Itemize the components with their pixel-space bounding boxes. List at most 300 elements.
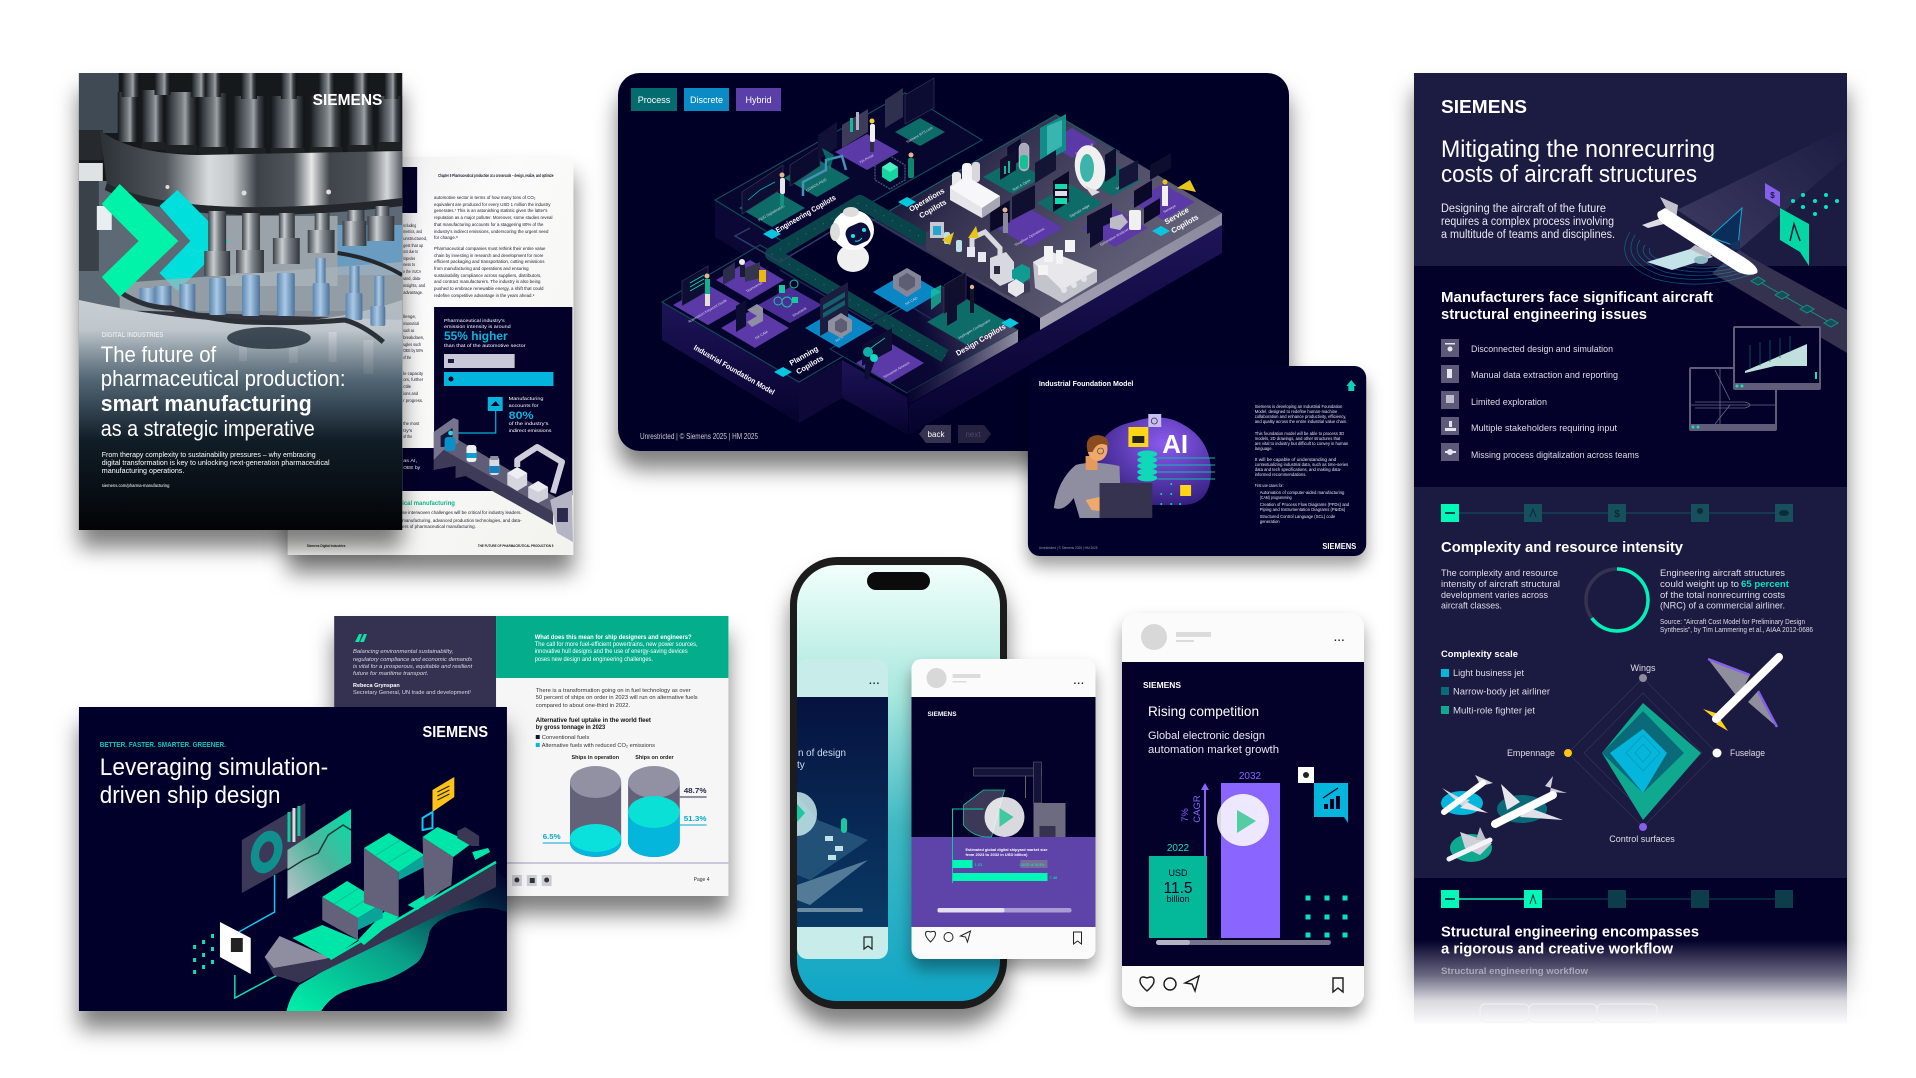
subtitle: digital transformation is key to unlocking next-generation pharmaceutical	[102, 458, 330, 467]
panel: pharma whitepaper cover	[79, 73, 402, 530]
legend: complexity scale: Light business jet	[1453, 668, 1525, 678]
play button	[1217, 794, 1269, 846]
body text: 50 percent of ships on order in 2023 will run on alternative fuels	[536, 695, 698, 701]
heading: workflow: Structural engineering encompasses	[1441, 924, 1699, 940]
icon: cyan chevron	[159, 190, 228, 291]
navy emissions callout: accounts for	[509, 403, 539, 409]
process chain	[1751, 277, 1838, 327]
card text: n of design	[798, 748, 846, 759]
title	[100, 754, 328, 809]
photo: pistons and vials	[79, 206, 402, 530]
quote panel	[334, 616, 496, 707]
url: siemens.com/pharma-manufacturing	[102, 483, 170, 489]
card body: dark: 7.46	[1050, 875, 1058, 880]
slide body text: contextualizing industrial data, such as time-series	[1255, 462, 1349, 467]
illustration: donut panel	[242, 803, 305, 893]
body text: redefine competitive advantage in the years ahead.⁹	[434, 293, 535, 299]
quote panel: Balancing environmental sustainability,	[353, 649, 453, 655]
cylinder chart: 51.3%	[684, 814, 707, 823]
dot matrix	[1791, 193, 1839, 216]
intro text: Designing the aircraft of the future	[1441, 203, 1606, 215]
left column partial text: ugles such	[403, 342, 421, 348]
dot matrix	[1306, 896, 1348, 938]
slide body text: generation	[1260, 519, 1280, 524]
left column partial text: gest that up	[403, 243, 423, 249]
icon: home	[1346, 380, 1356, 391]
panel: ship design cover	[79, 707, 507, 1011]
intro text	[1441, 203, 1615, 241]
tile labels: Senseye	[1162, 204, 1177, 214]
body text: and contract manufacturers. The industry is also being	[434, 279, 541, 285]
navy emissions callout: as AI,	[403, 458, 417, 464]
legend: complexity scale: Narrow-body jet airliner	[1453, 686, 1550, 696]
tile labels: Simcenter Amesim	[883, 361, 910, 379]
navy emissions callout: 55% higher	[444, 329, 508, 343]
copilot labels: Planning	[788, 344, 820, 368]
slide footer: Unrestricted | © Siemens 2025 | HM 2025	[1039, 545, 1098, 550]
title	[101, 342, 346, 441]
copilot labels: Service	[1163, 205, 1191, 226]
body text: sustainability compliance across suppliers, distributors,	[434, 273, 541, 279]
cylinder chart: Ships in operation	[572, 755, 619, 761]
chart legend: Alternative fuels with reduced CO₂ emissions	[542, 743, 655, 749]
complexity text: development varies across	[1441, 590, 1548, 601]
subheading: workflow: Structural engineering workflow	[1441, 966, 1589, 976]
legend: complexity scale: Multi-role fighter jet	[1453, 706, 1536, 716]
back button: back	[928, 430, 945, 439]
slide body text: collaboration and enhance productivity, efficiency,	[1255, 414, 1346, 419]
tile labels: Siemens RTS.com	[906, 126, 933, 144]
heading: issues: structural engineering issues	[1441, 306, 1647, 323]
title: costs of aircraft structures	[1441, 161, 1697, 188]
tile labels: Senti	[1115, 183, 1124, 191]
radar chart	[1507, 663, 1765, 844]
slide body text: language.	[1255, 446, 1273, 451]
logo: SIEMENS	[1143, 681, 1182, 690]
issue list	[1441, 339, 1639, 461]
navy emissions callout: Pharmaceutical industry's	[444, 318, 505, 324]
software tiles	[673, 118, 1195, 383]
next button	[958, 425, 991, 443]
navy emissions callout: Manufacturing	[509, 396, 544, 402]
back button	[919, 425, 951, 443]
subtitle: manufacturing operations.	[102, 466, 184, 475]
body text: from manufacturing and operations and ensuring	[434, 266, 529, 272]
page footer: Page 4	[694, 877, 710, 883]
body text	[434, 195, 552, 299]
bar chart: USD	[1168, 868, 1188, 878]
cylinder chart: 6.5%	[543, 832, 561, 841]
card text	[797, 748, 846, 771]
icon: green chevron	[102, 184, 178, 297]
logo: SIEMENS	[423, 724, 488, 741]
copilot labels: Engineering Copilots	[774, 193, 837, 235]
tile labels: Sigmatic edge	[1069, 204, 1090, 219]
tile labels: NX X	[835, 335, 845, 343]
body text: efficient packaging and transportation, cutting emissions	[434, 259, 545, 265]
icon: dollar tag	[1765, 183, 1780, 207]
tile labels: P&ID Digitalization	[758, 204, 785, 222]
body text: automotive sector in terms of how many tons of CO₂	[434, 195, 536, 201]
heading: issues	[1441, 289, 1713, 323]
card title: Rising competition	[1148, 703, 1259, 719]
nrc text: (NRC) of a commercial airliner.	[1660, 600, 1785, 612]
copilot labels: Copilots	[918, 197, 948, 220]
left column partial text: ors, further	[403, 377, 423, 383]
icon: machining centre	[1033, 240, 1097, 303]
copilot labels: Operations	[907, 186, 946, 214]
bar chart: CAGR	[1192, 795, 1203, 823]
cylinder chart	[543, 755, 707, 857]
bar chart: 7%	[1180, 808, 1191, 822]
complexity text: The complexity and resource	[1441, 568, 1558, 579]
illustration: container ship	[265, 827, 496, 983]
title: pharmaceutical production:	[101, 366, 346, 391]
slide body text: Creation of Process Flow Diagrams (PFDs) and	[1260, 502, 1350, 507]
card body: dark: 1.03	[974, 862, 983, 867]
chart heading: by gross tonnage in 2023	[536, 725, 606, 731]
tile labels: Automation Keyword Guide	[688, 298, 727, 324]
icon: factory	[950, 162, 1000, 218]
play button	[984, 797, 1024, 837]
planning figures	[682, 259, 941, 380]
panel: smartphone	[790, 557, 1007, 1009]
right operations slab	[872, 115, 1222, 330]
next button: next	[965, 430, 981, 439]
card text: ty	[797, 760, 805, 771]
connector lines	[235, 875, 278, 998]
body text: generates.⁷ This is an astonishing statistic given the latter's	[434, 208, 548, 214]
bar chart	[1149, 771, 1280, 938]
step tracker 1	[1441, 504, 1793, 522]
left column partial text: metrics, and	[403, 229, 422, 235]
slide body text: Piping and Instrumentation Diagrams (P&IDs)	[1260, 507, 1346, 512]
logo: SIEMENS	[1441, 97, 1527, 117]
illustration: airliner with wireframe wing	[1625, 197, 1758, 284]
tabs: Process	[638, 95, 671, 105]
page footer	[307, 543, 554, 548]
illustration: person with AI	[1054, 414, 1215, 518]
icon: white head	[1074, 145, 1106, 196]
icons: three aircraft classes	[1441, 775, 1567, 862]
left column partial text: unstructured,	[403, 236, 427, 242]
navy emissions callout: indirect emissions	[509, 428, 552, 434]
heading: workflow	[1441, 924, 1699, 958]
body text: for change.⁸	[434, 235, 458, 241]
wave	[286, 870, 507, 1011]
left column partial text: maceutical	[403, 321, 419, 327]
heading: workflow: a rigorous and creative workflow	[1441, 940, 1673, 958]
slide body text: are vital to industry but difficult to convey in human	[1255, 441, 1349, 446]
step tracker 1: $	[1614, 509, 1620, 520]
left column partial text: breakdown,	[403, 335, 424, 341]
copilot diamond icons	[763, 197, 1170, 377]
eyebrow: BETTER. FASTER. SMARTER. GREENER.	[100, 742, 226, 749]
cylinder chart: Ships on order	[635, 755, 675, 761]
tile labels: NX CAD	[905, 296, 919, 306]
illustration: white card	[220, 922, 251, 974]
slide body text	[1255, 404, 1350, 524]
tile labels: TIA Portal	[859, 153, 875, 165]
left column partial text: insights, and	[403, 283, 425, 289]
nrc text: Engineering aircraft structures	[1660, 568, 1785, 579]
card body: dark: from 2023 to 2032 in USD billion)	[966, 852, 1028, 857]
illustration: person with AI: AI	[1162, 431, 1188, 459]
card footer icons	[1140, 976, 1343, 992]
title: Leveraging simulation-	[100, 754, 328, 781]
tile labels: Generation Analyzer	[1099, 227, 1130, 247]
body text: pushed to embrace renewable energy, a shift that could	[434, 286, 544, 292]
tile labels: Sinumerik	[792, 306, 808, 318]
body text: equivalent are produced for every USD 1 million the industry	[434, 202, 551, 208]
intro text: requires a complex process involving	[1441, 216, 1614, 228]
left column partial text: le capacity	[403, 371, 424, 377]
left column partial text: e the VUCA	[403, 269, 422, 275]
left column partial text: ions and	[403, 391, 418, 397]
progress bar	[938, 908, 1072, 912]
complexity text: intensity of aircraft structural	[1441, 579, 1560, 590]
green question header: innovative hull designs and the use of energy-saving devices	[535, 649, 688, 655]
copilot labels	[692, 186, 1200, 397]
body text: reputation as a major polluter. Moreover, some studies reveal	[434, 215, 552, 221]
heading: issues: Manufacturers face significant aircraft	[1441, 289, 1713, 306]
footer note: Unrestricted | © Siemens 2025 | HM 2025	[640, 432, 758, 441]
issue list: Manual data extraction and reporting	[1471, 370, 1618, 381]
panel: isometric copilots slide	[618, 73, 1289, 451]
panel: pharma whitepaper inner page	[288, 157, 573, 555]
icon: service machine	[1110, 210, 1141, 230]
tabs: Hybrid	[745, 95, 772, 105]
panel: post card inside phone	[777, 659, 888, 959]
page footer	[507, 863, 728, 886]
operations objects: screens	[990, 114, 1196, 248]
copilot labels: Copilots	[1170, 212, 1200, 235]
card subtitle	[1148, 730, 1279, 756]
left column partial text: ost due to	[403, 249, 418, 255]
illustration: line chart panel	[287, 809, 351, 899]
chart heading	[536, 718, 651, 731]
navy emissions callout: of the industry's	[509, 421, 549, 427]
donut chart 65 percent	[1586, 569, 1648, 631]
body text: chain by investing in research and development for more	[434, 253, 544, 259]
complexity text: aircraft classes.	[1441, 600, 1502, 612]
card header	[926, 668, 1085, 688]
menu dots: ...	[869, 676, 880, 687]
card body: dark: CAGR of 16.8%	[1020, 863, 1044, 867]
quote panel: Rebeca Grynspan	[353, 683, 400, 689]
left column partial text: the most	[403, 421, 420, 427]
bar chart: billion	[1166, 894, 1190, 904]
tile labels	[688, 126, 1177, 379]
left column partial text: r progress.	[403, 398, 423, 404]
copilot band path	[735, 202, 960, 356]
nrc text: of the total nonrecurring costs	[1660, 590, 1785, 601]
dot field	[193, 934, 214, 974]
radar chart: Control surfaces	[1609, 834, 1675, 844]
navy emissions callout: OEE by	[403, 465, 421, 471]
slide body text: Model, designed to redefine human-machine	[1255, 409, 1338, 414]
panel: ship whitepaper inner page	[334, 616, 728, 896]
copilot labels: Copilots	[795, 353, 825, 376]
engineering platform	[715, 93, 982, 247]
green question header	[496, 616, 728, 678]
issue list: Disconnected design and simulation	[1471, 344, 1613, 355]
slide body text: (CAM) programming	[1260, 495, 1292, 500]
icon: chart tag	[1298, 767, 1348, 823]
panel: market growth post card	[1122, 613, 1364, 1007]
title	[1441, 136, 1715, 188]
conveyor illustration	[434, 418, 573, 542]
isometric base blocks	[662, 200, 1222, 435]
tile labels: NX CAM	[754, 330, 769, 340]
slide title: Industrial Foundation Model	[1039, 379, 1133, 388]
body text	[536, 688, 698, 709]
icon: dollar tag: $	[1770, 191, 1775, 200]
radar chart: Empennage	[1507, 748, 1555, 758]
nrc text: could weight up to	[1660, 579, 1739, 590]
phone notch	[867, 572, 930, 590]
title: smart manufacturing	[101, 391, 312, 416]
closing text: ers of pharmaceutical manufacturing.	[402, 524, 476, 530]
step tracker 2	[1441, 890, 1793, 908]
logo: SIEMENS	[313, 92, 382, 109]
slide body text: Siemens is developing an Industrial Foundation	[1255, 404, 1343, 409]
issue list: Missing process digitalization across teams	[1471, 450, 1639, 461]
card footer icons	[926, 931, 1082, 944]
section heading: clinical manufacturing: ical manufacturing	[402, 501, 455, 507]
navy emissions callout: emission intensity is around	[444, 324, 511, 330]
tile labels: Start & Opex	[1012, 178, 1032, 192]
left column partial text	[403, 223, 427, 440]
quote panel: regulatory compliance and economic demands	[353, 657, 472, 663]
closing text	[402, 510, 522, 530]
chart legend	[536, 735, 655, 749]
left column partial text: uted, data-	[403, 276, 421, 282]
tile labels: Shopfloor Operations	[1014, 227, 1045, 247]
slide body text: Structured Control Language (SCL) code	[1260, 514, 1336, 519]
tile labels: COMOS P&ID	[806, 177, 828, 193]
illustration: yellow flag	[423, 777, 454, 830]
slide body text: This foundation model will be able to process 3D	[1255, 431, 1345, 436]
isometric circuit illustration	[777, 792, 868, 905]
cylinder chart: 48.7%	[684, 786, 707, 795]
card body: dark: SIEMENS	[928, 711, 957, 718]
green question header: poses new design and engineering challenges.	[535, 657, 653, 663]
title: The future of	[101, 342, 217, 367]
quote panel: is vital for a prosperous, equitable and resilient	[353, 664, 473, 670]
faint workflow boxes	[1480, 1004, 1657, 1022]
card header: ...	[1334, 633, 1345, 644]
body text: compared to about one-third in 2022.	[536, 703, 630, 709]
logo: SIEMENS	[1322, 542, 1356, 551]
bar chart: 2032	[1239, 771, 1262, 782]
page footer: THE FUTURE OF PHARMACEUTICAL PRODUCTION 5	[478, 543, 554, 548]
copilot labels: Industrial Foundation Model	[692, 343, 776, 397]
bar chart: 21.5	[1234, 808, 1266, 825]
left column partial text: llenge,	[403, 314, 416, 320]
slide body text: First use cases for:	[1255, 483, 1284, 488]
radar chart: Wings	[1630, 663, 1656, 673]
chart legend: Conventional fuels	[542, 735, 590, 741]
tile labels: Teamcenter	[745, 280, 764, 294]
tile labels: Insights Hub	[1075, 142, 1094, 156]
legend: complexity scale: Complexity scale	[1441, 649, 1518, 659]
radar chart: Fuselage	[1730, 748, 1765, 758]
card subtitle: Global electronic design	[1148, 730, 1265, 742]
body text: that manufacturing accounts for a staggering 80% of the	[434, 222, 544, 228]
icon: plane with highlighted parts	[1703, 657, 1779, 731]
title: driven ship design	[100, 782, 281, 809]
slide body text: models, 2D drawings, and other structures that	[1255, 436, 1341, 441]
panel: aircraft structures infographic	[1398, 73, 1863, 1022]
nrc text	[1660, 568, 1813, 634]
slide body text: Automation of computer-aided manufacturing	[1260, 490, 1345, 495]
legend: complexity scale	[1441, 649, 1550, 716]
tabs	[631, 88, 781, 111]
nrc text: 65 percent	[1741, 579, 1790, 590]
card body: dark	[912, 697, 1096, 927]
tabs: Discrete	[690, 95, 723, 105]
icon: robot assistant	[830, 207, 874, 272]
icon: compass card	[1780, 208, 1809, 266]
green question header: The call for more fuel-efficient powertrains, new power sources,	[535, 642, 698, 648]
intro text: a multitude of teams and disciplines.	[1441, 229, 1615, 241]
issue list: Limited exploration	[1471, 397, 1547, 408]
chart heading: Alternative fuel uptake in the world fleet	[536, 718, 651, 724]
quote panel: future for maritime transport.	[353, 671, 428, 677]
page header: Chapter 5 Pharmaceutical production at a crossroads – design, realize, and optimize	[438, 173, 554, 178]
issue list: Multiple stakeholders requiring input	[1471, 423, 1617, 434]
nrc text: Synthesis", by Tim Lammering et al., AIAA 2012-0686	[1660, 627, 1813, 634]
closing text: manufacturing, advanced production technologies, and data-	[402, 518, 522, 524]
heading: complexity: Complexity and resource intensity	[1441, 539, 1684, 556]
navy emissions callout: than that of the automotive sector	[444, 343, 526, 349]
subtitle: From therapy complexity to sustainability pressures – why embracing	[102, 450, 316, 459]
photo: pharmaceutical filling machine	[79, 73, 402, 311]
navy emissions callout: 80%	[509, 410, 534, 422]
conveyor and robot arm	[926, 222, 1030, 298]
card body	[1122, 662, 1364, 966]
title: Mitigating the nonrecurring	[1441, 136, 1715, 163]
slide body text: and quality across the entire industrial value chain.	[1255, 419, 1347, 424]
card header: ...	[1074, 676, 1085, 687]
tile labels: Hydrogen Configurator	[958, 318, 992, 340]
left column partial text: OEE by 50%	[403, 348, 424, 354]
body text: industry's indirect emissions, underscoring the urgent need	[434, 229, 549, 235]
navy emissions callout	[402, 307, 572, 515]
slide body text: It will be capable of understanding and	[1255, 457, 1337, 462]
bar chart: 11.5	[1164, 880, 1193, 897]
panel: industrial foundation model slide	[1028, 366, 1366, 556]
card subtitle: automation market growth	[1148, 744, 1279, 756]
left column partial text: ncluding	[403, 223, 416, 229]
bar chart: 2022	[1167, 843, 1190, 854]
progress bar	[1156, 940, 1331, 945]
design platform	[830, 286, 1018, 405]
left column partial text: of the	[403, 355, 411, 361]
complexity text	[1441, 568, 1560, 612]
green question header: What does this mean for ship designers and engineers?	[535, 635, 692, 641]
body text: There is a transformation going on in fuel technology as over	[536, 688, 691, 694]
left column partial text: of the	[403, 434, 412, 440]
panel: ship post card	[912, 659, 1096, 959]
card header	[1141, 624, 1345, 650]
left column partial text: ctile	[403, 384, 411, 390]
planning platform	[661, 244, 843, 383]
bar chart: USD	[1240, 796, 1260, 806]
eyebrow: DIGITAL INDUSTRIES	[102, 332, 164, 339]
icon: bookmark	[864, 937, 872, 949]
